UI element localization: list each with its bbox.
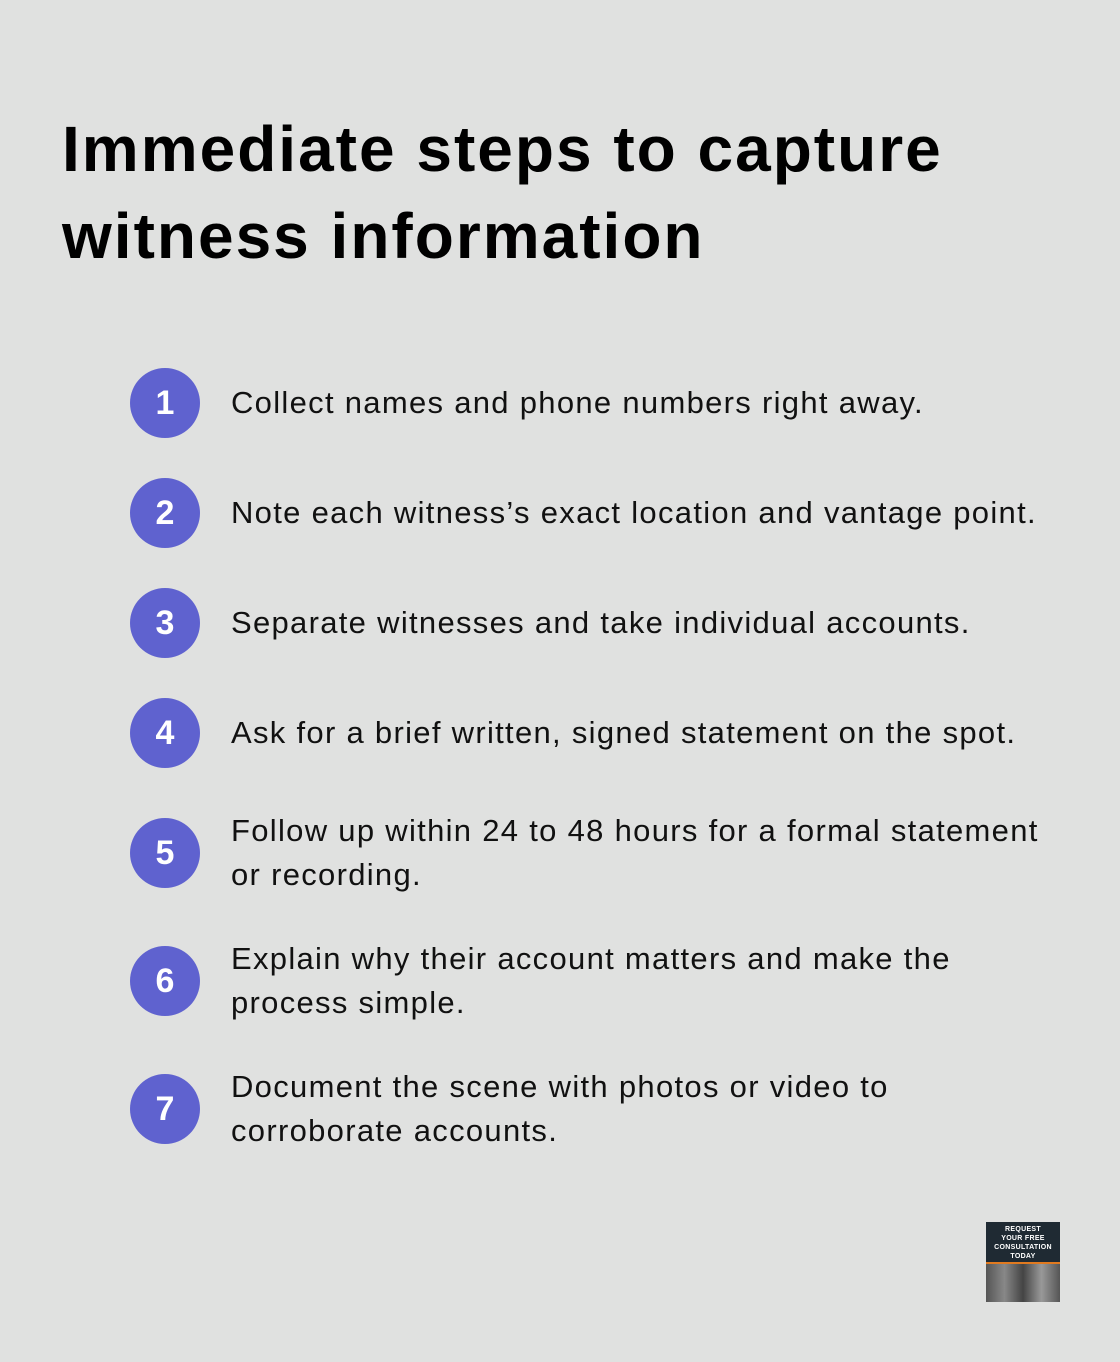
title: Immediate steps to capture bbox=[62, 113, 943, 185]
logo: consultation badge: REQUEST bbox=[1005, 1226, 1041, 1233]
step 6: 6 bbox=[156, 962, 174, 1000]
step 7: Document the scene with photos or video to corroborate accounts. bbox=[231, 1069, 889, 1148]
step 5: 5 bbox=[156, 834, 174, 872]
logo: consultation badge: CONSULTATION bbox=[994, 1244, 1052, 1251]
title: witness information bbox=[62, 200, 704, 272]
step 6: Explain why their account matters and make the process simple. bbox=[231, 941, 951, 1020]
logo: consultation badge: YOUR FREE bbox=[1001, 1235, 1045, 1242]
title bbox=[62, 113, 943, 272]
step 3: 3 bbox=[156, 604, 174, 642]
step 3 bbox=[130, 588, 971, 658]
step 4: 4 bbox=[156, 714, 174, 752]
step 4: Ask for a brief written, signed statement on the spot. bbox=[231, 715, 1016, 750]
logo: consultation badge bbox=[986, 1222, 1060, 1302]
step 2 bbox=[130, 478, 1037, 548]
step 1: Collect names and phone numbers right away. bbox=[231, 385, 924, 420]
step 5: Follow up within 24 to 48 hours for a formal statement or recording. bbox=[231, 813, 1039, 892]
step 7: 7 bbox=[156, 1090, 174, 1128]
step 4 bbox=[130, 698, 1016, 768]
step 2: 2 bbox=[156, 494, 174, 532]
logo: consultation badge: TODAY bbox=[1010, 1253, 1036, 1260]
step 1: 1 bbox=[156, 384, 174, 422]
step 1 bbox=[130, 368, 924, 438]
step 3: Separate witnesses and take individual accounts. bbox=[231, 605, 971, 640]
step 2: Note each witness’s exact location and vantage point. bbox=[231, 495, 1037, 530]
